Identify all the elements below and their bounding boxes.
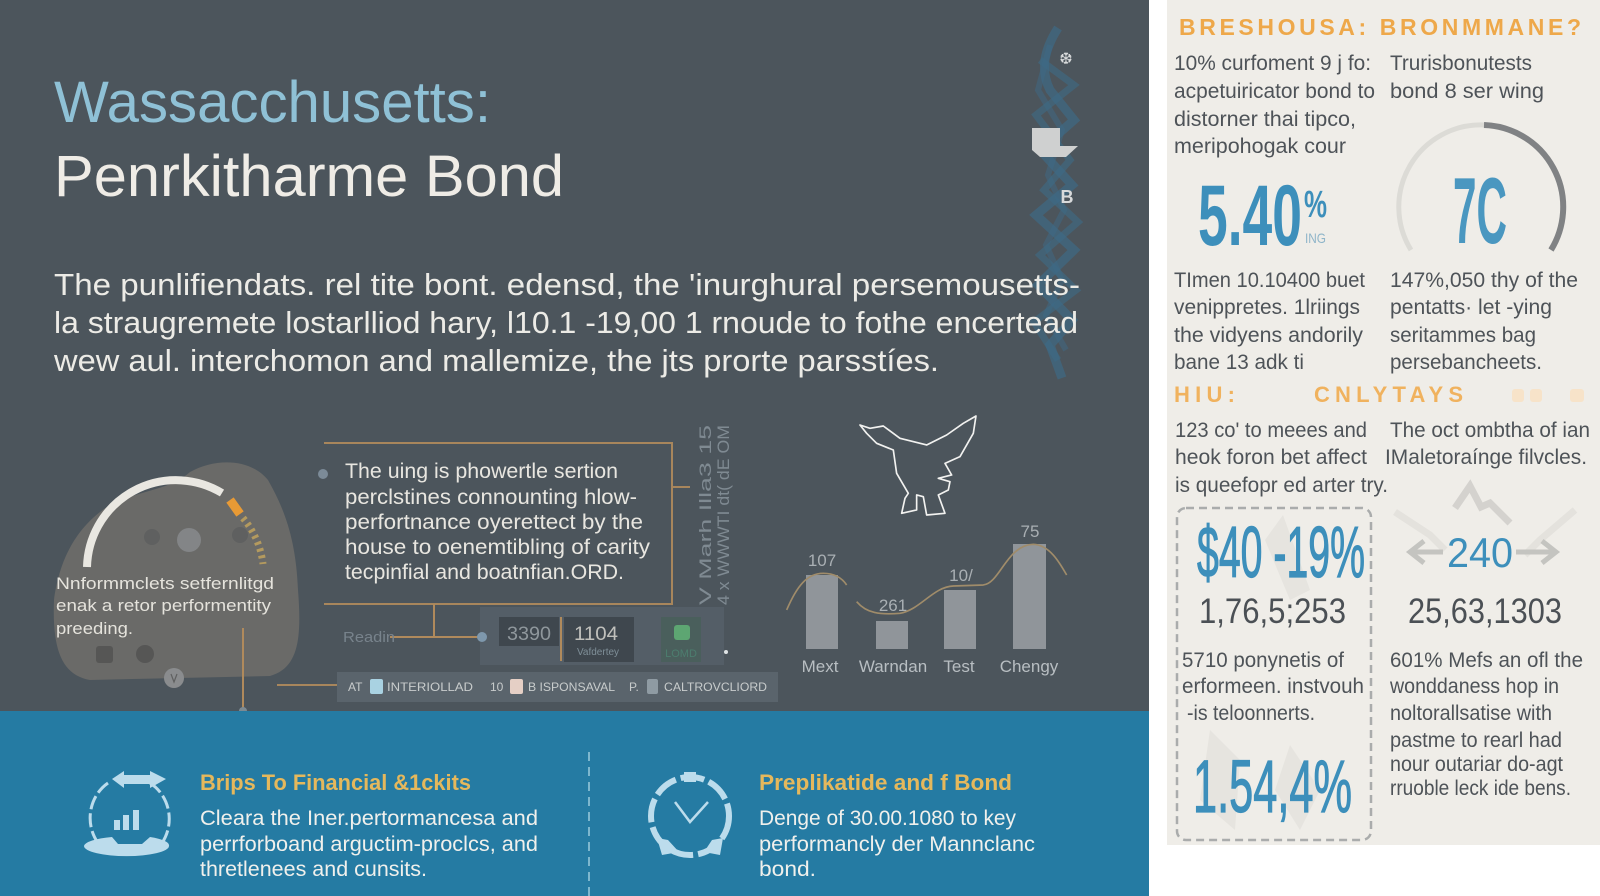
callout box: perclstines connounting hlow-: [345, 486, 637, 509]
icon: chart cycle: [84, 771, 169, 856]
text: middle right column: seritammes bag: [1390, 324, 1536, 347]
legend bar: AT: [348, 680, 363, 694]
connector line to footer: [239, 628, 247, 715]
connector: read: Readin: [343, 629, 395, 646]
bar chart: Mext: [802, 657, 839, 676]
heading: second section: HIU:: [1174, 382, 1235, 407]
text: top left column: acpetuiricator bond to: [1174, 80, 1375, 103]
bar chart: 75: [1021, 522, 1039, 541]
text: middle right column: persebancheets.: [1390, 351, 1542, 374]
metric widget: [480, 607, 728, 665]
text: lower right column: wonddaness hop in: [1389, 675, 1559, 698]
text: lower right column: 601% Mefs an ofl the: [1390, 649, 1583, 672]
text: top right column: bond 8 ser wing: [1390, 80, 1544, 103]
metric widget: 1104: [574, 624, 618, 645]
gauge arc: [87, 480, 222, 567]
panel: right column: [1167, 0, 1600, 845]
text: box description: 5710 ponynetis of: [1182, 649, 1344, 672]
title: [54, 70, 564, 209]
text: lower right column: nour outariar do-agt: [1390, 753, 1563, 776]
text: box description: [1182, 649, 1364, 725]
stat: $40-19%: $40 -19%: [1197, 513, 1365, 593]
intro text block: wew aul. interchomon and mallemize, the jts prorte parsstíes.: [53, 343, 939, 378]
panel: teal footer: [0, 711, 1149, 896]
text: left footer: thretlenees and cunsits.: [200, 858, 427, 881]
text: box description: -is teloonnerts.: [1187, 702, 1315, 725]
gauge with stat: 76: 7C: [1453, 158, 1507, 263]
icon: gear check: [651, 772, 729, 855]
vertical text: 4 x WWWTI dt( dE OM: [714, 425, 733, 605]
decorative ribbon with icons: B: [1060, 187, 1074, 207]
connector: read: [343, 604, 487, 646]
text: section left: [1175, 419, 1388, 497]
title: Penrkitharme Bond: [54, 144, 564, 209]
stat: 1.54,4%: 1.54,4%: [1193, 745, 1352, 828]
intro text block: la straugremete lostarlliod hary, l10.1 -19,00 1 rnoude to fothe encertead: [54, 305, 1078, 340]
bar chart: Warndan: [859, 657, 927, 676]
text: right footer: bond.: [759, 858, 816, 881]
gauge panel: [54, 462, 299, 688]
dashed stat box: [1177, 508, 1371, 840]
text: middle right column: 147%,050 thy of the: [1390, 269, 1578, 292]
panel: dark main background: [0, 0, 1149, 711]
text: top left column: distorner thai tipco,: [1174, 108, 1356, 131]
heading: left footer: Brips To Financial &1ckits: [200, 770, 471, 795]
text: right footer: [759, 807, 1035, 881]
text: section left: 123 co' to meees and: [1175, 419, 1367, 442]
title: Wassacchusetts:: [54, 70, 491, 135]
text: lower right column: [1389, 649, 1583, 800]
text: section left: heok foron bet affect: [1175, 446, 1367, 469]
intro text block: [53, 267, 1080, 378]
big stat: 5.40%: 5.40: [1198, 168, 1302, 264]
text: top right column: Trurisbonutests: [1390, 52, 1532, 75]
text: lower right column: pastme to rearl had: [1390, 729, 1562, 752]
text: right footer: Denge of 30.00.1080 to key: [759, 807, 1016, 830]
gauge with stat: 76: [1399, 125, 1563, 263]
text: top right column: [1390, 52, 1544, 103]
gauge caption: enak a retor performentity: [56, 596, 272, 615]
heading: right footer: Preplikatide and f Bond: [759, 770, 1012, 795]
callout box: [318, 443, 690, 604]
text: top left column: meripohogak cour: [1174, 135, 1346, 158]
heading: second section: CNLYTAYS: [1314, 382, 1463, 407]
callout box: perfortnance oyerettect by the: [345, 511, 643, 534]
heading: second section: [1174, 382, 1584, 407]
text: middle right column: pentatts· let -ying: [1390, 296, 1552, 319]
decorative ribbon with icons: ❆: [1059, 51, 1073, 68]
metric widget: Vafdertey: [577, 647, 619, 658]
text: middle left column: TImen 10.10400 buet: [1174, 269, 1365, 292]
text: left footer: [200, 807, 538, 881]
bar chart: [787, 522, 1067, 676]
metric widget: LOMD: [665, 648, 697, 660]
stat with arrows: 240: [1410, 529, 1556, 576]
text: middle right column: [1390, 269, 1578, 374]
text: section right: The oct ombtha of ian: [1390, 419, 1590, 442]
metric widget: 3390: [507, 624, 551, 645]
bar chart: 107: [808, 551, 836, 570]
text: lower right column: rruoble leck ide bens.: [1390, 777, 1571, 800]
text: top left column: 10% curfoment 9 j fo:: [1174, 52, 1371, 75]
faded background shapes: [1200, 486, 1575, 830]
text: left footer: Cleara the Iner.pertormancesa and: [200, 807, 538, 830]
text: middle left column: [1174, 269, 1365, 374]
bar chart: Test: [943, 657, 975, 676]
legend bar: INTERIOLLAD: [387, 680, 473, 694]
text: section right: [1385, 419, 1590, 469]
text: left footer: perrforboand arguctim-proclcs, and: [200, 833, 538, 856]
stat: 25,63,1303: 25,63,1303: [1408, 592, 1562, 631]
legend bar: CALTROVCLIORD: [664, 680, 767, 694]
gauge orange segment: [230, 500, 240, 514]
callout box: house to oenemtibling of carity: [345, 536, 651, 559]
legend bar: P.: [629, 680, 639, 694]
stat with arrows: 240: 240: [1447, 529, 1513, 576]
gauge caption: Nnformmclets setfernlitgd: [56, 574, 274, 593]
bar chart: 10/: [949, 566, 973, 585]
legend bar: 10: [490, 680, 504, 694]
callout box: tecpinfial and boatnfian.ORD.: [345, 561, 624, 584]
text: middle left column: bane 13 adk ti: [1174, 351, 1304, 374]
callout box: The uing is phowertle sertion: [345, 460, 618, 483]
text: box description: erformeen. instvouh: [1182, 675, 1364, 698]
bar chart: 261: [879, 596, 907, 615]
stat: 1,76,5;253: 1,76,5;253: [1199, 592, 1346, 631]
text: middle left column: venippretes. 1lriings: [1174, 296, 1360, 319]
text: lower right column: noltorallsatise with: [1390, 702, 1552, 725]
text: middle left column: the vidyens andorily: [1174, 324, 1364, 347]
gauge caption: [56, 574, 274, 638]
text: right footer: performancly der Mannclanc: [759, 833, 1035, 856]
legend bar: B ISPONSAVAL: [528, 680, 615, 694]
big stat: 5.40%: %: [1304, 184, 1327, 226]
intro text block: The punlifiendats. rel tite bont. edensd, the 'inurghural persemousetts-: [54, 267, 1080, 302]
gauge caption: preeding.: [56, 619, 133, 638]
vertical text: V Marh Illa3 15: [696, 425, 715, 605]
heading: top right: BRESHOUSA: BRONMMANE?: [1179, 14, 1581, 40]
decorative ribbon with icons: [1032, 28, 1078, 378]
icon: bird outline: [860, 416, 976, 515]
text: section left: is queefopr ed arter try.: [1175, 474, 1388, 497]
text: section right: IMaletoraínge filvcles.: [1385, 446, 1587, 469]
big stat: 5.40%: ING: [1305, 230, 1326, 246]
bar chart: Chengy: [1000, 657, 1059, 676]
text: top left column: [1174, 52, 1375, 158]
vertical text: [696, 425, 733, 605]
legend bar: [277, 672, 778, 702]
